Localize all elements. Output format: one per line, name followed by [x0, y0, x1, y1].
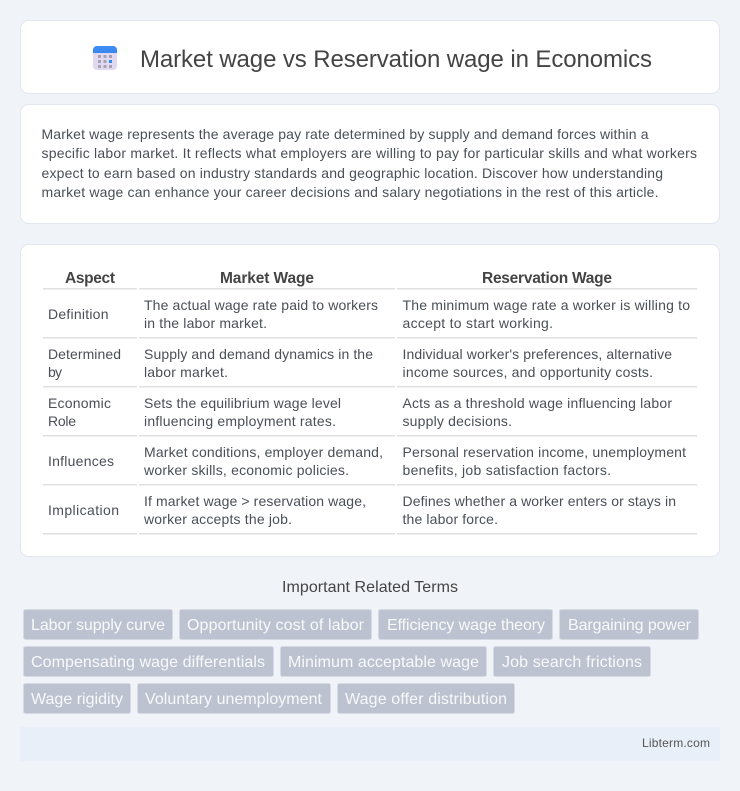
table row: definition: accept to start working. [402, 315, 553, 331]
table row: influences: Personal reservation income, unemployment [402, 444, 686, 460]
tag: opportunity cost of labor: Opportunity cost of labor [187, 617, 365, 634]
table header: Market Wage [220, 270, 314, 287]
text block: introduction: specific labor market. It reflects what employers are willing to pay for particular skills and what workers [42, 145, 697, 161]
table row: influences [43, 444, 697, 486]
table row: economic role: supply decisions. [402, 413, 512, 429]
footer: Libterm.com [642, 736, 710, 750]
footer [20, 727, 720, 761]
title: Market wage vs Reservation wage in Economics [140, 46, 652, 73]
table row: determined by: labor market. [144, 364, 228, 380]
table row: influences: worker skills, economic policies. [143, 462, 349, 478]
tag: wage offer distribution [338, 684, 514, 714]
table row: determined by: income sources, and opportunity costs. [402, 364, 653, 380]
tag: job search frictions: Job search frictions [502, 654, 642, 671]
panel: header [20, 20, 720, 94]
heading: important related terms: Important Related Terms [282, 579, 458, 596]
table row: implication: worker accepts the job. [143, 511, 292, 527]
table header: Reservation Wage [482, 270, 612, 287]
table header: Aspect [65, 270, 115, 287]
tag: efficiency wage theory [378, 610, 552, 640]
tag: compensating wage differentials [24, 646, 274, 676]
tag: minimum acceptable wage: Minimum acceptable wage [288, 654, 479, 671]
text block: introduction: market wage can enhance your career decisions and salary negotiations in the rest of this article. [42, 184, 658, 200]
table row: determined by: Determined [48, 346, 121, 362]
table row: economic role: Economic [48, 395, 111, 411]
tag: labor supply curve [24, 610, 172, 640]
table row: determined by [43, 346, 697, 388]
table row: determined by: by [48, 364, 62, 380]
table row: definition: Definition [48, 306, 108, 322]
table row: influences: benefits, job satisfaction factors. [402, 462, 611, 478]
tag: efficiency wage theory: Efficiency wage theory [387, 617, 545, 634]
table row: implication: Implication [48, 502, 119, 518]
panel: related term tags [24, 610, 698, 714]
panel: comparison table [20, 244, 720, 556]
table row: determined by: Individual worker's preferences, alternative [402, 346, 672, 362]
table row: implication: the labor force. [402, 511, 498, 527]
table row: definition [43, 297, 697, 338]
tag: opportunity cost of labor [180, 610, 372, 640]
tag: bargaining power [560, 610, 698, 640]
tag: voluntary unemployment: Voluntary unemployment [145, 691, 323, 708]
tag: wage rigidity [24, 684, 130, 714]
tag: wage offer distribution: Wage offer distribution [345, 691, 507, 708]
table row: influences: Market conditions, employer demand, [144, 444, 383, 460]
text block: introduction [42, 126, 697, 200]
table row: influences: Influences [48, 453, 114, 469]
text block: introduction: expect to earn based on industry standards and geographic location. Discover how understanding [42, 165, 663, 181]
table row: economic role: Acts as a threshold wage influencing labor [402, 395, 672, 411]
table row: definition: The minimum wage rate a worker is willing to [402, 297, 690, 313]
table row: economic role: Sets the equilibrium wage level [144, 395, 341, 411]
table row: definition: The actual wage rate paid to workers [144, 297, 378, 313]
table row: economic role: influencing employment rates. [144, 413, 336, 429]
table row: implication: If market wage > reservation wage, [144, 493, 366, 509]
tag: wage rigidity: Wage rigidity [31, 691, 123, 708]
table row: definition: in the labor market. [144, 315, 267, 331]
tag: compensating wage differentials: Compensating wage differentials [31, 654, 265, 671]
panel: introduction [20, 104, 720, 224]
tag: minimum acceptable wage [280, 646, 486, 676]
table row: implication: Defines whether a worker enters or stays in [402, 493, 676, 509]
table row: economic role: Role [48, 413, 76, 429]
tag: voluntary unemployment [138, 684, 330, 714]
tag: bargaining power: Bargaining power [568, 617, 692, 634]
tag: labor supply curve: Labor supply curve [31, 617, 165, 634]
text block: introduction: Market wage represents the average pay rate determined by supply and demand forces within a [42, 126, 649, 142]
table row: determined by: Supply and demand dynamics in the [144, 346, 373, 362]
tag: job search frictions [494, 646, 650, 676]
table row: economic role [43, 395, 697, 436]
table row: implication [43, 493, 697, 534]
table header [43, 270, 697, 290]
icon: calendar [93, 46, 117, 70]
